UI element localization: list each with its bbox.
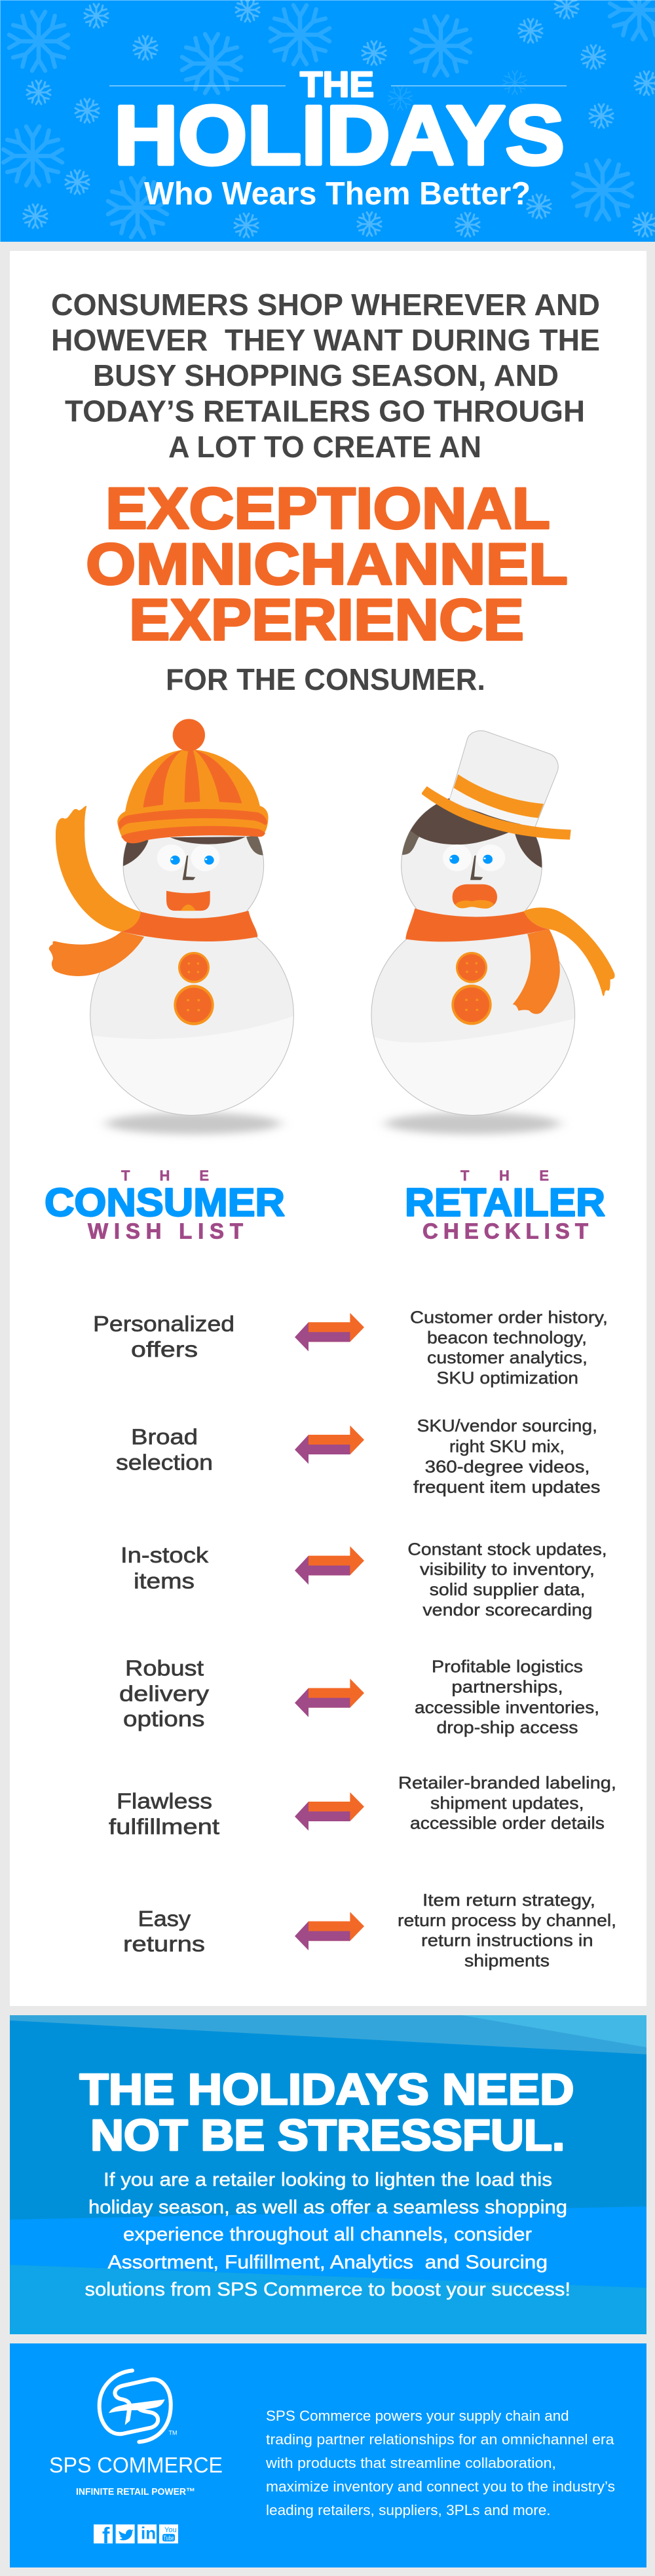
company description: trading partner relationships for an omnichannel era bbox=[266, 2431, 614, 2448]
consumer wish bbox=[119, 1656, 210, 1731]
call to action body: Assortment, Fulfillment, Analytics and Sourcing bbox=[107, 2252, 548, 2273]
title: HOLIDAYS bbox=[114, 89, 565, 182]
retailer checklist: shipments bbox=[464, 1951, 550, 1971]
call to action body: solutions from SPS Commerce to boost your success! bbox=[85, 2279, 571, 2300]
heading: the retailer checklist bbox=[405, 1167, 605, 1243]
trademark: TM bbox=[169, 2430, 177, 2436]
heading: the retailer checklist: CHECKLIST bbox=[422, 1219, 588, 1243]
icon: youtube: You bbox=[164, 2526, 177, 2534]
arrow bbox=[295, 1546, 364, 1585]
snowman: consumer bbox=[49, 719, 297, 1134]
consumer wish bbox=[116, 1424, 213, 1474]
row: flawless fulfillment bbox=[109, 1773, 616, 1838]
snowman: retailer bbox=[369, 730, 615, 1134]
consumer wish bbox=[93, 1312, 234, 1361]
call to action heading: THE HOLIDAYS NEED bbox=[80, 2065, 574, 2114]
face bbox=[157, 844, 219, 911]
retailer checklist bbox=[398, 1773, 616, 1833]
retailer checklist: customer analytics, bbox=[427, 1348, 588, 1367]
row: robust delivery options bbox=[119, 1656, 599, 1737]
retailer checklist: visibility to inventory, bbox=[420, 1559, 595, 1579]
retailer checklist: frequent item updates bbox=[413, 1477, 600, 1497]
heading: the retailer checklist: THE bbox=[460, 1167, 549, 1184]
brand name: SPS COMMERCE bbox=[49, 2453, 223, 2477]
heading: the retailer checklist: RETAILER bbox=[405, 1181, 605, 1224]
sps logo mark bbox=[100, 2370, 171, 2442]
buttons bbox=[451, 952, 492, 1025]
face bbox=[443, 844, 505, 909]
retailer checklist: return process by channel, bbox=[398, 1910, 616, 1930]
body bbox=[371, 933, 575, 1116]
retailer checklist: Retailer-branded labeling, bbox=[398, 1773, 616, 1792]
heading: the consumer wish list: CONSUMER bbox=[45, 1181, 285, 1224]
retailer checklist: accessible inventories, bbox=[415, 1697, 599, 1717]
row: personalized offers bbox=[93, 1307, 608, 1388]
orange headline: OMNICHANNEL bbox=[86, 531, 568, 596]
intro text: CONSUMERS SHOP WHEREVER AND bbox=[51, 288, 600, 322]
consumer wish bbox=[123, 1906, 205, 1956]
consumer wish: Broad bbox=[131, 1424, 198, 1449]
shadow bbox=[106, 1112, 280, 1134]
intro text bbox=[51, 288, 600, 464]
call to action body: experience throughout all channels, consider bbox=[123, 2224, 532, 2245]
panel: main white panel bbox=[10, 251, 646, 2006]
shadow bbox=[385, 1112, 560, 1134]
body bbox=[90, 934, 294, 1116]
row: in-stock items bbox=[121, 1539, 607, 1619]
consumer wish bbox=[109, 1789, 219, 1838]
panel: footer bbox=[10, 2343, 646, 2567]
call to action body bbox=[85, 2169, 571, 2300]
orange headline: EXCEPTIONAL bbox=[105, 476, 550, 541]
intro text: BUSY SHOPPING SEASON, AND bbox=[93, 358, 559, 392]
panel: call to action bbox=[10, 2015, 646, 2334]
retailer checklist: right SKU mix, bbox=[449, 1436, 565, 1456]
arrow bbox=[295, 1313, 364, 1352]
retailer checklist: Constant stock updates, bbox=[407, 1539, 607, 1559]
retailer checklist: SKU/vendor sourcing, bbox=[417, 1416, 597, 1435]
retailer checklist: drop-ship access bbox=[436, 1718, 578, 1737]
consumer wish: returns bbox=[123, 1931, 205, 1956]
row: broad selection bbox=[116, 1416, 600, 1497]
heading: the consumer wish list: THE bbox=[121, 1167, 209, 1184]
orange headline bbox=[86, 476, 568, 653]
retailer checklist: vendor scorecarding bbox=[422, 1600, 592, 1619]
retailer checklist: solid supplier data, bbox=[430, 1580, 586, 1599]
intro closing line: FOR THE CONSUMER. bbox=[166, 662, 485, 696]
intro text: A LOT TO CREATE AN bbox=[168, 430, 481, 464]
intro text: TODAY’S RETAILERS GO THROUGH bbox=[65, 394, 585, 428]
retailer checklist bbox=[398, 1890, 616, 1971]
retailer checklist: Profitable logistics bbox=[432, 1657, 583, 1676]
call to action body: If you are a retailer looking to lighten the load this bbox=[103, 2169, 552, 2190]
arrow bbox=[295, 1792, 364, 1830]
call to action heading bbox=[80, 2065, 574, 2160]
heading: the consumer wish list bbox=[45, 1167, 285, 1243]
icon: facebook bbox=[94, 2524, 113, 2548]
company description: leading retailers, suppliers, 3PLs and more. bbox=[266, 2502, 551, 2518]
arrow bbox=[295, 1678, 364, 1717]
knit hat bbox=[117, 719, 269, 843]
arrow bbox=[295, 1426, 364, 1464]
head bbox=[123, 835, 265, 917]
title: THE bbox=[300, 64, 374, 105]
retailer checklist: Customer order history, bbox=[410, 1307, 608, 1327]
scarf bbox=[49, 806, 257, 976]
retailer checklist: SKU optimization bbox=[436, 1368, 578, 1388]
row: easy returns bbox=[123, 1890, 616, 1971]
consumer wish: selection bbox=[116, 1450, 213, 1474]
retailer checklist bbox=[415, 1657, 599, 1737]
icon: youtube bbox=[159, 2524, 178, 2543]
arrow bbox=[295, 1912, 364, 1950]
consumer wish: Easy bbox=[138, 1906, 191, 1931]
orange headline: EXPERIENCE bbox=[129, 587, 524, 653]
icon: facebook: f bbox=[102, 2524, 110, 2548]
icon: twitter bbox=[116, 2524, 135, 2543]
buttons bbox=[174, 952, 214, 1025]
retailer checklist: partnerships, bbox=[451, 1676, 563, 1696]
retailer checklist bbox=[413, 1416, 600, 1497]
retailer checklist bbox=[407, 1539, 607, 1619]
panel: header banner bbox=[0, 0, 655, 242]
retailer checklist: accessible order details bbox=[410, 1813, 605, 1833]
icon: youtube: Tube bbox=[164, 2535, 174, 2542]
call to action body: holiday season, as well as offer a seamless shopping bbox=[88, 2197, 567, 2218]
consumer wish bbox=[121, 1543, 209, 1593]
tagline: INFINITE RETAIL POWER™ bbox=[76, 2486, 195, 2497]
company description bbox=[265, 2408, 615, 2518]
intro text: HOWEVER THEY WANT DURING THE bbox=[51, 323, 600, 357]
scarf bbox=[405, 907, 615, 1014]
head bbox=[401, 798, 542, 917]
retailer checklist bbox=[410, 1307, 608, 1388]
consumer wish: Personalized bbox=[93, 1312, 234, 1336]
retailer checklist: beacon technology, bbox=[427, 1327, 587, 1347]
company description: with products that streamline collaboration, bbox=[265, 2455, 556, 2471]
consumer wish: options bbox=[123, 1707, 204, 1731]
retailer checklist: Item return strategy, bbox=[422, 1890, 595, 1910]
retailer checklist: shipment updates, bbox=[430, 1793, 584, 1813]
retailer checklist: return instructions in bbox=[421, 1931, 593, 1950]
subtitle: Who Wears Them Better? bbox=[144, 176, 531, 212]
icon: linkedin: in bbox=[141, 2524, 156, 2543]
company description: maximize inventory and connect you to the industry’s bbox=[266, 2478, 615, 2495]
heading: the consumer wish list: WISH LIST bbox=[88, 1219, 243, 1243]
consumer wish: Flawless bbox=[117, 1789, 212, 1813]
consumer wish: Robust bbox=[125, 1656, 204, 1680]
retailer checklist: 360-degree videos, bbox=[425, 1457, 590, 1477]
top hat bbox=[422, 730, 571, 840]
consumer wish: In-stock bbox=[121, 1543, 209, 1567]
call to action heading: NOT BE STRESSFUL. bbox=[90, 2111, 565, 2160]
company description: SPS Commerce powers your supply chain and bbox=[266, 2408, 569, 2424]
consumer wish: items bbox=[134, 1568, 195, 1593]
consumer wish: fulfillment bbox=[109, 1814, 219, 1838]
consumer wish: offers bbox=[131, 1337, 198, 1361]
consumer wish: delivery bbox=[119, 1682, 210, 1706]
